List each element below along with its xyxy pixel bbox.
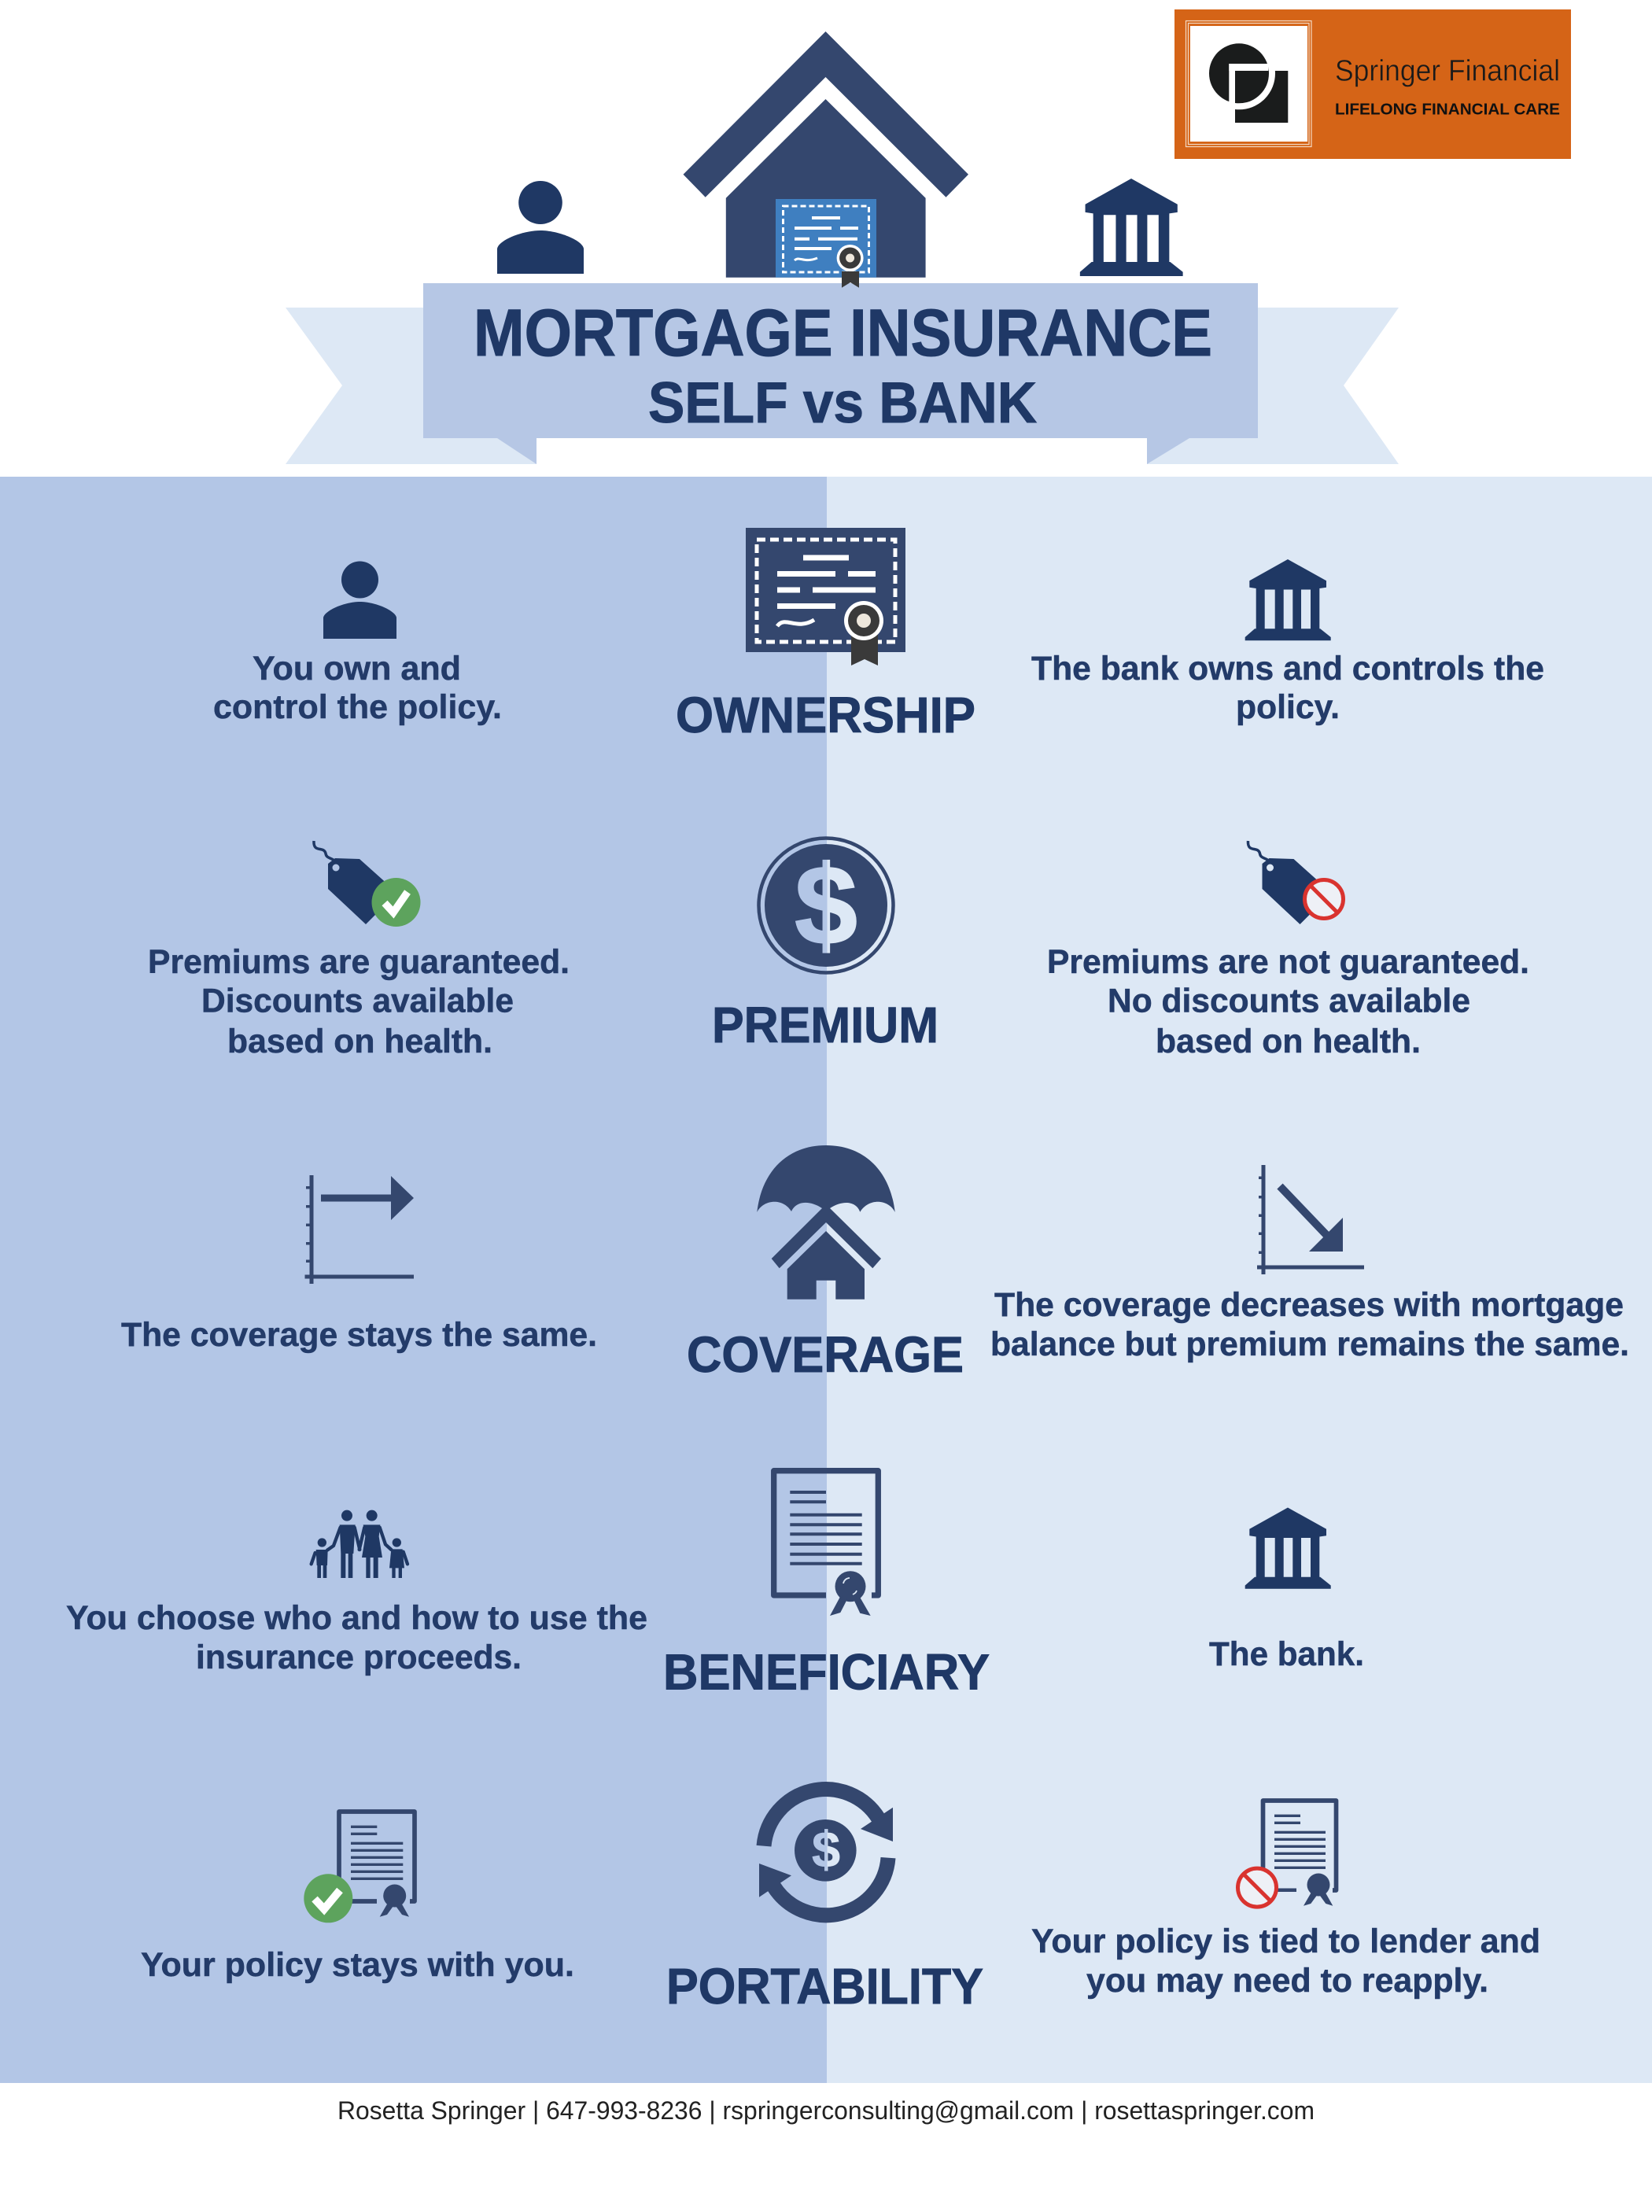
text: self beneficiary xyxy=(66,1599,647,1676)
icon: bank xyxy=(1245,1507,1331,1589)
text: self premium xyxy=(148,943,570,1060)
text: bank premium xyxy=(1047,943,1529,1060)
icon: large person xyxy=(497,181,584,274)
text: bank ownership xyxy=(1031,650,1544,726)
icon: document with prohibited sign xyxy=(1238,1801,1336,1907)
icon: tag with check xyxy=(314,841,420,927)
text: bank premium: No discounts available xyxy=(1108,982,1470,1019)
text: bank beneficiary: The bank. xyxy=(1209,1635,1364,1673)
text: self ownership: You own and xyxy=(253,650,461,688)
heading: premium: PREMIUM xyxy=(712,997,938,1053)
row 5: portability xyxy=(141,1790,1540,2015)
text: bank premium: Premiums are not guaranteed. xyxy=(1047,943,1529,981)
text: self premium: Discounts available xyxy=(201,982,514,1019)
logo: Springer Financial: LIFELONG FINANCIAL CARE xyxy=(1335,101,1560,119)
text: bank premium: based on health. xyxy=(1156,1023,1421,1060)
icon: certificate xyxy=(746,528,905,665)
text: self beneficiary: You choose who and how to use the xyxy=(66,1599,647,1637)
subtitle: SELF vs BANK xyxy=(648,371,1037,435)
row 1: ownership xyxy=(213,528,1544,743)
banner main xyxy=(423,283,1258,464)
text: self ownership xyxy=(213,650,502,726)
footer contact line: Rosetta Springer | 647-993-8236 | rspringerconsulting@gmail.com | rosettaspringer.com xyxy=(337,2096,1315,2125)
icon: tag with prohibited sign xyxy=(1248,841,1344,924)
icon: policy document with seal xyxy=(774,1471,878,1616)
logo: Springer Financial: Springer Financial xyxy=(1335,55,1560,88)
row 4: beneficiary xyxy=(66,1471,1364,1700)
heading: coverage: COVERAGE xyxy=(687,1326,964,1383)
text: bank coverage xyxy=(990,1286,1629,1363)
heading: beneficiary: BENEFICIARY xyxy=(663,1643,990,1700)
logo: Springer Financial xyxy=(1174,9,1571,159)
text: bank coverage: balance but premium remains the same. xyxy=(990,1325,1629,1363)
icon: declining chart xyxy=(1257,1165,1364,1274)
text: self portability: Your policy stays with you. xyxy=(141,1946,574,1984)
text: self ownership: control the policy. xyxy=(213,688,502,726)
icon: dollar coin: $ xyxy=(795,843,857,968)
heading: portability: PORTABILITY xyxy=(666,1958,983,2015)
text: self premium: Premiums are guaranteed. xyxy=(148,943,570,981)
icon: umbrella over house xyxy=(757,1145,895,1300)
icon: money cycle arrows xyxy=(759,1790,893,1915)
panel: left self column background xyxy=(0,477,827,2083)
icon: family xyxy=(312,1510,407,1578)
text: bank coverage: The coverage decreases with mortgage xyxy=(994,1286,1624,1324)
icon: large bank xyxy=(1080,179,1183,276)
text: bank portability: Your policy is tied to lender and xyxy=(1031,1923,1540,1960)
panel: right bank column background xyxy=(827,477,1652,2083)
text: self coverage: The coverage stays the same. xyxy=(121,1316,597,1354)
text: self premium: based on health. xyxy=(227,1023,492,1060)
icon: house with certificate xyxy=(683,31,968,288)
icon: money cycle arrows: $ xyxy=(812,1821,840,1878)
title: MORTGAGE INSURANCE xyxy=(474,296,1212,370)
text: bank portability: you may need to reapply. xyxy=(1086,1962,1488,2000)
text: bank ownership: The bank owns and controls the xyxy=(1031,650,1544,688)
icon: dollar coin xyxy=(758,839,894,972)
icon: bank xyxy=(1245,559,1331,640)
text: bank portability xyxy=(1031,1923,1540,2000)
icon: flat line chart xyxy=(305,1175,414,1284)
heading: ownership: OWNERSHIP xyxy=(676,687,975,743)
row 2: premium xyxy=(148,839,1529,1060)
icon: document with check xyxy=(304,1812,415,1923)
text: bank ownership: policy. xyxy=(1236,688,1340,726)
banner ribbon tails xyxy=(286,308,1399,464)
row 3: coverage xyxy=(121,1145,1629,1383)
text: self beneficiary: insurance proceeds. xyxy=(196,1639,522,1676)
icon: person xyxy=(323,562,396,639)
